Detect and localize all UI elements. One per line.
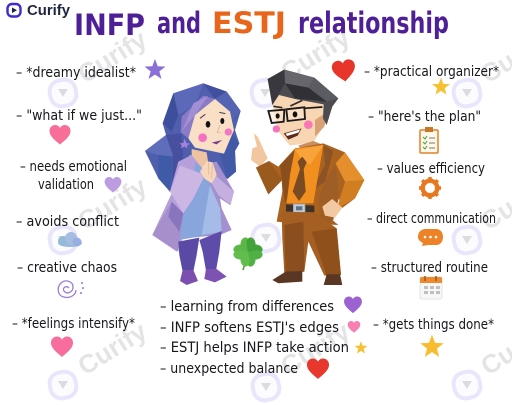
title: and (157, 6, 201, 40)
shirt (287, 145, 323, 203)
icon: large gold star (420, 335, 444, 357)
icon: calendar (420, 276, 442, 299)
watermark pattern: Curify (275, 22, 355, 87)
shared relationship list (160, 299, 349, 377)
jacket (256, 143, 364, 225)
icon: spiral (58, 281, 83, 297)
watermark pattern: Curify (275, 316, 355, 381)
icon: cloud (58, 232, 82, 247)
watermark pattern: Curify (72, 316, 152, 381)
face and ears (273, 92, 327, 146)
ESTJ traits list: – "here's the plan" (368, 109, 481, 125)
hands (200, 161, 217, 183)
INFP traits list: validation (38, 177, 94, 193)
icon: center pink heart (348, 321, 360, 333)
belt (286, 204, 314, 212)
icon: red heart (331, 58, 357, 83)
raised hand (251, 133, 268, 167)
brand logo: Curify: Curify (27, 3, 70, 19)
brand logo: Curify (8, 3, 70, 19)
mouth (284, 128, 302, 140)
INFP traits list: – needs emotional (20, 159, 127, 175)
INFP traits list: – *feelings intensify* (12, 316, 135, 332)
watermark pattern: Curify (72, 24, 152, 89)
dress (179, 162, 222, 240)
watermark pattern: Curify (72, 171, 152, 236)
title: relationship (298, 6, 449, 40)
character: ESTJ man (251, 70, 364, 285)
hip hand (322, 199, 342, 218)
icon: large pink heart (51, 336, 73, 357)
ESTJ traits list: – values efficiency (377, 161, 485, 177)
INFP traits list (12, 65, 142, 332)
hair (268, 70, 338, 125)
icon: gear (419, 177, 441, 199)
watermark pattern: Curify (275, 171, 355, 236)
icon: purple star (145, 59, 165, 79)
shared relationship list: – learning from differences (160, 299, 334, 315)
trousers (282, 212, 341, 276)
character: INFP woman (145, 83, 241, 285)
INFP traits list: – "what if we just..." (16, 108, 142, 124)
tie (293, 157, 307, 201)
icon: center purple heart (344, 296, 362, 313)
icon: center red heart (307, 358, 329, 379)
icon: speech bubble (418, 229, 443, 246)
legs (178, 238, 199, 272)
icon: clipboard checklist (420, 127, 438, 153)
title (74, 6, 449, 42)
icon: lilac heart (105, 177, 121, 193)
INFP traits list: – creative chaos (17, 260, 117, 276)
icon: center gold star (355, 341, 367, 354)
title: ESTJ (212, 6, 286, 40)
INFP traits list: – *dreamy idealist* (16, 65, 136, 81)
shared relationship list: – INFP softens ESTJ's edges (160, 320, 339, 336)
icon: four-leaf clover (232, 236, 264, 270)
shared relationship list: – unexpected balance (160, 361, 298, 377)
glasses (268, 107, 305, 123)
coat (152, 155, 201, 252)
shared relationship list: – ESTJ helps INFP take action (160, 340, 349, 356)
face (188, 99, 234, 154)
icon: gold star (432, 78, 450, 95)
icon: pink heart (50, 125, 70, 144)
ESTJ traits list (364, 64, 499, 333)
INFP traits list: – avoids conflict (16, 214, 119, 230)
title: INFP (74, 8, 145, 42)
ESTJ traits list: – structured routine (371, 260, 488, 276)
